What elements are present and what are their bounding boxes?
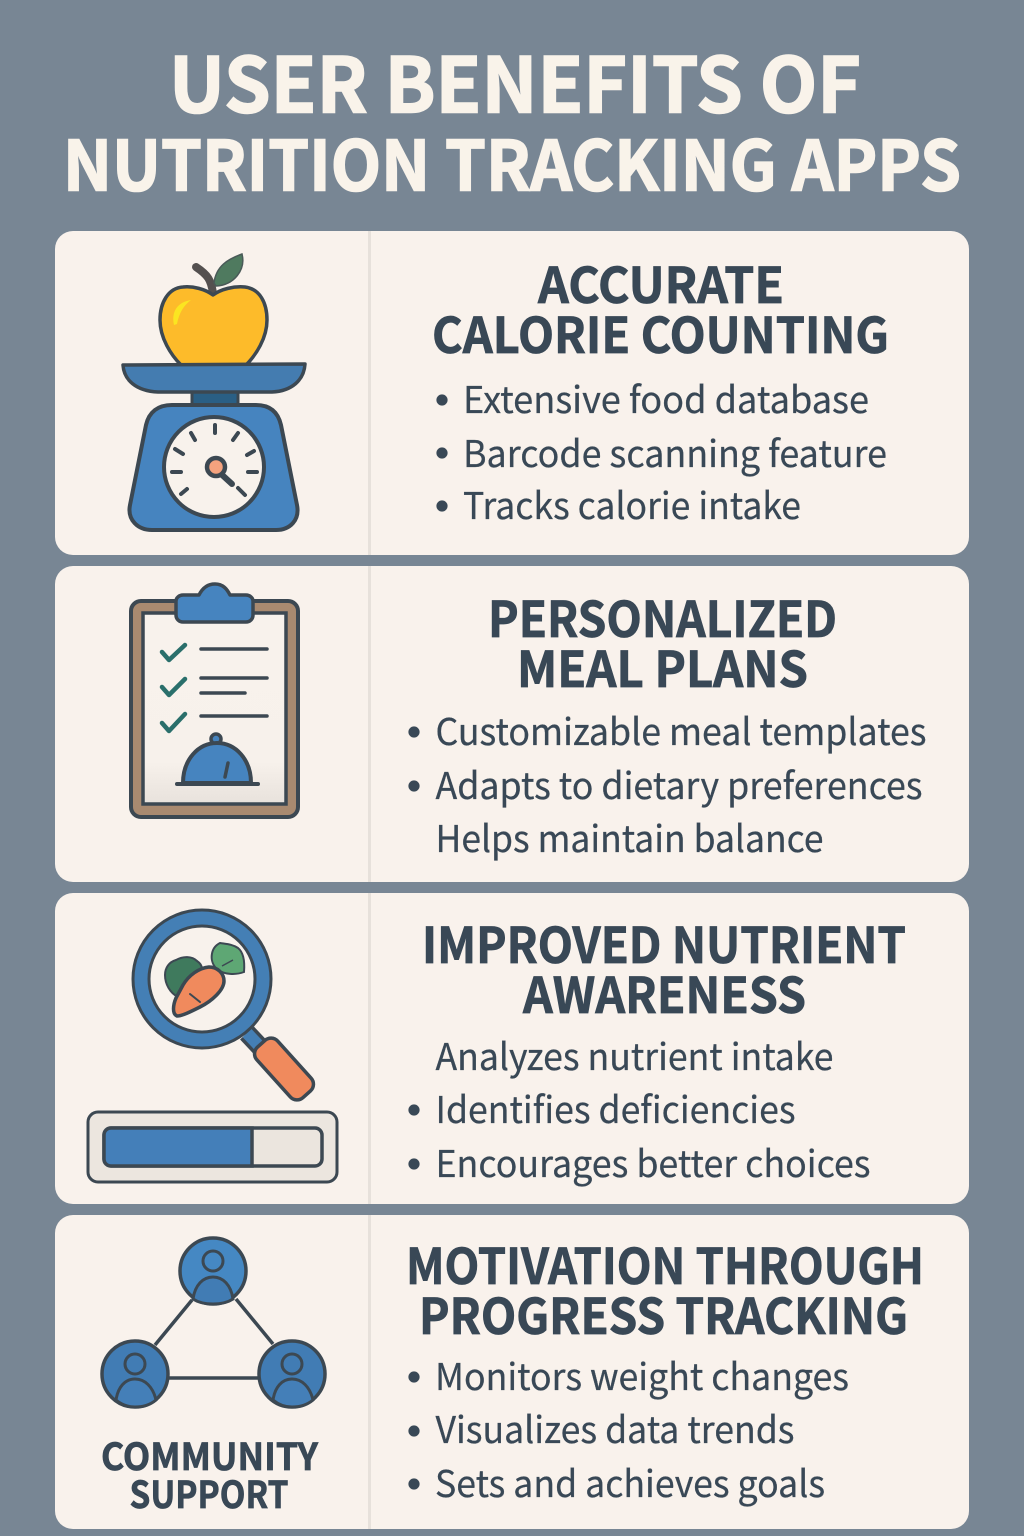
heading xyxy=(488,581,837,702)
panel: improved nutrient awareness xyxy=(55,893,969,1204)
panel: accurate calorie counting xyxy=(55,231,969,555)
bullet list: Extensive food database xyxy=(463,370,869,424)
bullet list: Adapts to dietary preferences xyxy=(436,756,922,810)
heading xyxy=(432,247,889,368)
bullet list: Helps maintain balance xyxy=(436,809,824,863)
heading: ACCURATE xyxy=(537,247,784,318)
bullet list: Barcode scanning feature xyxy=(463,424,887,478)
bullet list: Monitors weight changes xyxy=(435,1347,849,1401)
community support label xyxy=(101,1427,319,1519)
heading: IMPROVED NUTRIENT xyxy=(422,907,906,978)
progress bar xyxy=(88,1112,337,1182)
icon: community network xyxy=(102,1238,325,1407)
bullet list xyxy=(408,1027,870,1188)
heading: PERSONALIZED xyxy=(488,581,837,652)
bullet list: Visualizes data trends xyxy=(436,1400,794,1454)
community support label: SUPPORT xyxy=(130,1465,288,1519)
heading xyxy=(406,1228,924,1349)
panel: motivation through progress tracking xyxy=(55,1215,969,1529)
heading: MOTIVATION THROUGH xyxy=(406,1228,924,1299)
bullet list: Tracks calorie intake xyxy=(463,476,801,530)
heading: PROGRESS TRACKING xyxy=(419,1278,908,1349)
bullet list: Encourages better choices xyxy=(436,1134,870,1188)
bullet list: Identifies deficiencies xyxy=(436,1080,796,1134)
bullet list: Sets and achieves goals xyxy=(435,1454,825,1508)
heading xyxy=(422,907,906,1028)
icon: magnifying glass over carrot xyxy=(141,918,317,1104)
icon: apple on kitchen scale xyxy=(123,254,305,530)
bullet list: Analyzes nutrient intake xyxy=(436,1027,834,1081)
title: USER BENEFITS OF xyxy=(169,24,861,134)
bullet list: Customizable meal templates xyxy=(436,702,926,756)
bullet list xyxy=(408,1347,849,1508)
heading: AWARENESS xyxy=(522,957,806,1028)
icon: clipboard with checklist and cloche xyxy=(131,584,298,817)
title: NUTRITION TRACKING APPS xyxy=(63,110,961,210)
title xyxy=(63,24,961,210)
panel: personalized meal plans xyxy=(55,566,969,882)
heading: CALORIE COUNTING xyxy=(432,297,889,368)
community support label: COMMUNITY xyxy=(101,1427,319,1481)
bullet list xyxy=(436,370,887,530)
bullet list xyxy=(408,702,926,863)
heading: MEAL PLANS xyxy=(517,631,808,702)
